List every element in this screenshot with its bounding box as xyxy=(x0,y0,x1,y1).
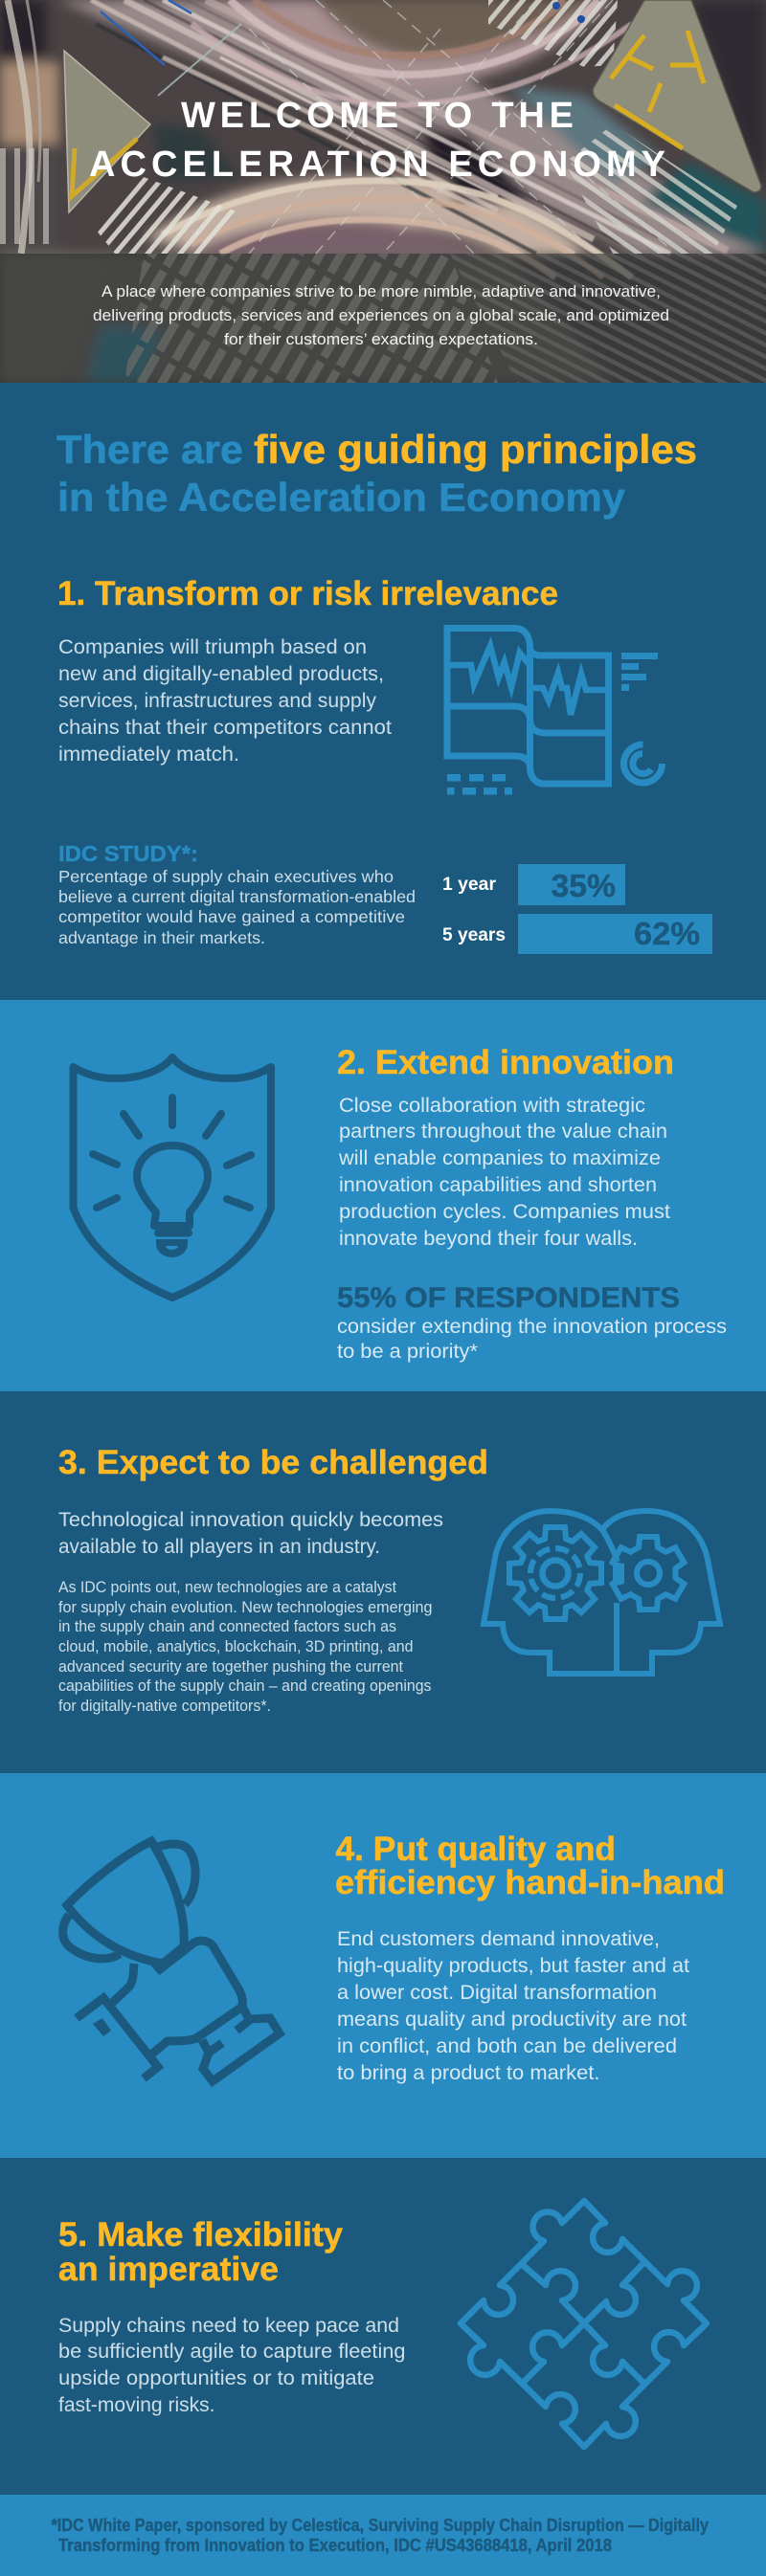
text block: principle 3 detail: advanced security are together pushing the current xyxy=(58,1658,403,1676)
panel: principle 2 xyxy=(0,1000,766,1391)
panel: principle 3 xyxy=(0,1391,766,1773)
text block: principle 2: Close collaboration with strategic xyxy=(339,1095,645,1117)
text block: principle 2: innovate beyond their four walls. xyxy=(339,1228,638,1250)
main heading: There are xyxy=(56,427,243,472)
text block: principle 3 lead: available to all players in an industry. xyxy=(58,1536,380,1558)
text block: principle 3 detail: for digitally-native competitors*. xyxy=(58,1698,271,1715)
text block: principle 4: in conflict, and both can be delivered xyxy=(337,2035,677,2057)
hero subtitle: delivering products, services and experiences on a global scale, and optimized xyxy=(93,306,669,324)
panel: principle 5 xyxy=(0,2158,766,2495)
text block: principle 4: high-quality products, but faster and at xyxy=(337,1955,689,1977)
pale checkered left band xyxy=(0,148,49,244)
bar chart: competitive advantage: 5 years xyxy=(442,925,506,945)
heading: principle 4 xyxy=(335,1831,725,1901)
text block: principle 4: to bring a product to market. xyxy=(337,2062,599,2084)
hero title xyxy=(89,96,665,185)
text block: principle 4: a lower cost. Digital transformation xyxy=(337,1982,657,2004)
right traffic island xyxy=(593,0,761,192)
text block: principle 4 xyxy=(337,1928,689,2084)
IDC study text: advantage in their markets. xyxy=(58,928,265,947)
hero header xyxy=(0,0,766,383)
hero subtitle: for their customers’ exacting expectations. xyxy=(224,330,538,348)
icon: dashboard charts xyxy=(447,628,663,794)
bar chart: competitive advantage: 1 year xyxy=(442,875,497,895)
left traffic island xyxy=(64,51,150,212)
text block: principle 1: new and digitally-enabled products, xyxy=(58,663,384,685)
IDC study text: IDC STUDY*: xyxy=(58,841,198,866)
text block: principle 3 detail: As IDC points out, new technologies are a catalyst xyxy=(58,1579,396,1596)
text block: principle 4: means quality and productivity are not xyxy=(337,2009,687,2031)
light trail streaks xyxy=(91,0,728,278)
stat: 55% of respondents: to be a priority* xyxy=(337,1341,478,1363)
bar chart: competitive advantage: 35% xyxy=(552,868,616,903)
text block: principle 2: innovation capabilities and shorten xyxy=(339,1174,657,1196)
hero subtitle xyxy=(93,282,669,348)
heading: principle 4: 4. Put quality and xyxy=(335,1831,616,1868)
panel: principle 4 xyxy=(0,1773,766,2158)
text block: principle 3 detail: for supply chain evolution. New technologies emerging xyxy=(58,1599,433,1616)
text block: principle 2 xyxy=(338,1095,670,1250)
left pale arcs xyxy=(8,0,30,254)
text block: principle 3 detail: in the supply chain and connected factors such as xyxy=(58,1618,396,1635)
icon: puzzle pieces xyxy=(461,2201,707,2447)
text block: principle 5 xyxy=(58,2315,406,2416)
stat: 55% of respondents: 55% OF RESPONDENTS xyxy=(337,1282,680,1314)
blue sign markers xyxy=(552,2,560,10)
IDC study text xyxy=(58,841,416,947)
footnote text: *IDC White Paper, sponsored by Celestica, Surviving Supply Chain Disruption — Digitally xyxy=(52,2516,709,2535)
heading: principle 5: an imperative xyxy=(58,2251,279,2288)
road stripes under the text band xyxy=(124,254,498,383)
text block: principle 5: Supply chains need to keep pace and xyxy=(58,2315,399,2337)
bar chart: competitive advantage: 62% xyxy=(634,916,700,951)
zebra crossings xyxy=(96,177,239,254)
IDC study text: believe a current digital transformation-enabled xyxy=(58,887,416,906)
text block: principle 2: will enable companies to maximize xyxy=(338,1147,661,1169)
heading: principle 1: 1. Transform or risk irrelevance xyxy=(57,575,558,612)
text block: principle 5: fast-moving risks. xyxy=(58,2394,214,2416)
text block: principle 1: chains that their competitors cannot xyxy=(58,717,392,739)
text block: principle 1: immediately match. xyxy=(58,744,239,766)
text block: principle 1: Companies will triumph based on xyxy=(58,636,367,658)
heading: principle 5 xyxy=(58,2216,344,2288)
text block: principle 3 detail: capabilities of the supply chain – and creating openings xyxy=(58,1677,431,1695)
text block: principle 5: upside opportunities or to mitigate xyxy=(58,2367,374,2389)
hero title: WELCOME TO THE xyxy=(181,96,574,136)
main heading: five guiding principles xyxy=(254,427,697,472)
stat: 55% of respondents xyxy=(337,1282,727,1363)
hero title: ACCELERATION ECONOMY xyxy=(89,144,665,185)
footnote text: Transforming from Innovation to Execution, IDC #US43688418, April 2018 xyxy=(58,2536,612,2555)
stat: 55% of respondents: consider extending the innovation process xyxy=(337,1316,727,1338)
main heading xyxy=(56,427,697,520)
IDC study text: Percentage of supply chain executives who xyxy=(58,867,394,886)
thin crossing lines xyxy=(249,0,670,268)
darkened text band xyxy=(0,254,766,383)
text block: principle 4: End customers demand innovative, xyxy=(337,1928,660,1950)
icon: two heads with gears xyxy=(484,1511,720,1674)
heading: principle 3: 3. Expect to be challenged xyxy=(58,1444,488,1481)
heading: principle 2: 2. Extend innovation xyxy=(337,1044,674,1081)
footnote text xyxy=(52,2516,709,2555)
text block: principle 3 lead xyxy=(58,1509,443,1558)
text block: principle 1 xyxy=(58,636,392,766)
text block: principle 3 detail xyxy=(58,1579,433,1715)
blue trail accents xyxy=(101,0,192,65)
text block: principle 2: partners throughout the value chain xyxy=(339,1121,667,1143)
heading: principle 5: 5. Make flexibility xyxy=(58,2216,344,2254)
IDC study text: competitor would have gained a competitive xyxy=(58,907,405,926)
text block: principle 2: production cycles. Companies must xyxy=(339,1201,670,1223)
main heading: in the Acceleration Economy xyxy=(57,475,626,520)
bar chart: competitive advantage xyxy=(442,864,712,954)
text block: principle 1: services, infrastructures and supply xyxy=(58,690,377,712)
heading: principle 4: efficiency hand-in-hand xyxy=(335,1864,725,1901)
panel: principle 1 xyxy=(0,383,766,1000)
hero subtitle: A place where companies strive to be more nimble, adaptive and innovative, xyxy=(101,282,661,300)
panel: footer citation xyxy=(0,2495,766,2576)
photo: aerial intersection with light trails xyxy=(0,0,766,383)
text block: principle 5: be sufficiently agile to capture fleeting xyxy=(58,2341,406,2363)
icon: shield with light bulb xyxy=(73,1057,271,1298)
text block: principle 3 detail: cloud, mobile, analytics, blockchain, 3D printing, and xyxy=(58,1638,414,1655)
icon: trophy xyxy=(63,1841,280,2081)
text block: principle 3 lead: Technological innovation quickly becomes xyxy=(58,1509,443,1531)
